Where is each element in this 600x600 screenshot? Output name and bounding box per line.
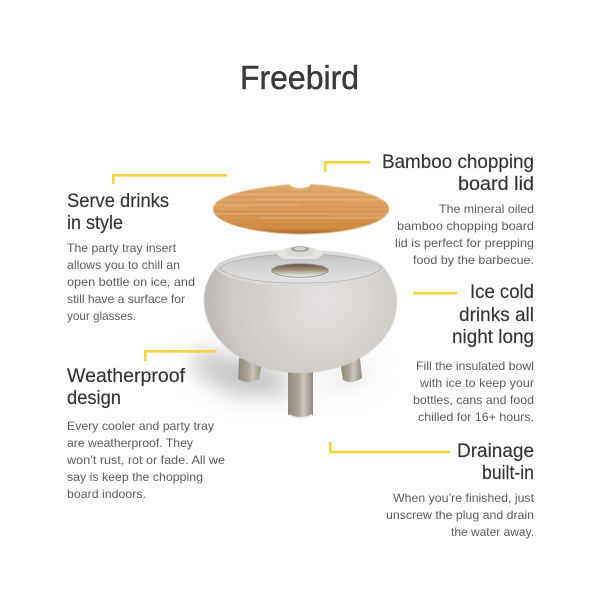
product: Freebird cooler <box>195 184 397 419</box>
heading: built-in <box>482 462 534 484</box>
tray plate <box>219 254 382 283</box>
body text: are weatherproof. They <box>67 436 193 450</box>
heading <box>452 281 534 348</box>
body text: The mineral oiled <box>439 202 534 216</box>
bottle hole <box>270 263 330 279</box>
body text <box>66 419 225 501</box>
title: Freebird <box>240 59 359 96</box>
heading <box>67 190 169 234</box>
heading: Serve drinks <box>67 190 169 212</box>
body text: board indoors. <box>67 487 146 501</box>
body text: with ice to keep your <box>419 376 534 390</box>
callout: ice cold <box>413 281 534 424</box>
body text: food by the barbecue. <box>413 253 534 267</box>
heading: Ice cold <box>470 281 534 303</box>
back leg right <box>340 358 362 382</box>
heading: night long <box>452 326 534 348</box>
body text <box>395 202 534 267</box>
heading: Drainage <box>457 440 534 462</box>
heading: drinks all <box>459 304 534 326</box>
body text: lid is perfect for prepping <box>395 236 534 250</box>
connector <box>325 162 370 172</box>
body text: chilled for 16+ hours. <box>418 410 534 424</box>
front leg <box>288 370 313 419</box>
connector <box>413 292 457 295</box>
body text: Every cooler and party tray <box>67 419 214 433</box>
callout: serve drinks <box>67 175 227 323</box>
bowl <box>204 250 397 373</box>
heading <box>382 151 534 195</box>
heading: Bamboo chopping <box>382 151 534 173</box>
body text: open bottle on ice, and <box>67 275 195 289</box>
body text: bottles, cans and food <box>413 393 534 407</box>
body text: Fill the insulated bowl <box>416 359 534 373</box>
heading <box>67 365 186 409</box>
connector <box>145 351 216 361</box>
heading: design <box>67 387 121 409</box>
callout: weatherproof <box>66 351 225 501</box>
connector <box>330 442 450 452</box>
body text: allows you to chill an <box>67 258 180 272</box>
body text: your glasses. <box>67 309 136 323</box>
plug cap <box>276 246 324 259</box>
body text: still have a surface for <box>67 292 185 306</box>
floor shadow <box>195 350 375 395</box>
callout: bamboo lid <box>325 151 534 267</box>
back leg left <box>238 358 262 382</box>
heading: board lid <box>458 173 534 195</box>
heading <box>457 440 534 484</box>
body text: won’t rust, rot or fade. All we <box>66 453 225 467</box>
callout: drainage <box>330 440 535 539</box>
bamboo lid <box>205 184 392 234</box>
heading: Weatherproof <box>67 365 186 387</box>
body text: bamboo chopping board <box>397 219 534 233</box>
body text: The party tray insert <box>67 241 177 255</box>
body text: When you’re finished, just <box>393 491 535 505</box>
body text <box>67 241 195 323</box>
body text <box>386 491 535 539</box>
heading: in style <box>67 212 123 234</box>
body text <box>413 359 534 424</box>
connector <box>113 175 227 184</box>
body text: unscrew the plug and drain <box>386 508 534 522</box>
body text: the water away. <box>451 525 534 539</box>
bowl upper lip <box>216 250 385 286</box>
body text: say is keep the chopping <box>67 470 203 484</box>
